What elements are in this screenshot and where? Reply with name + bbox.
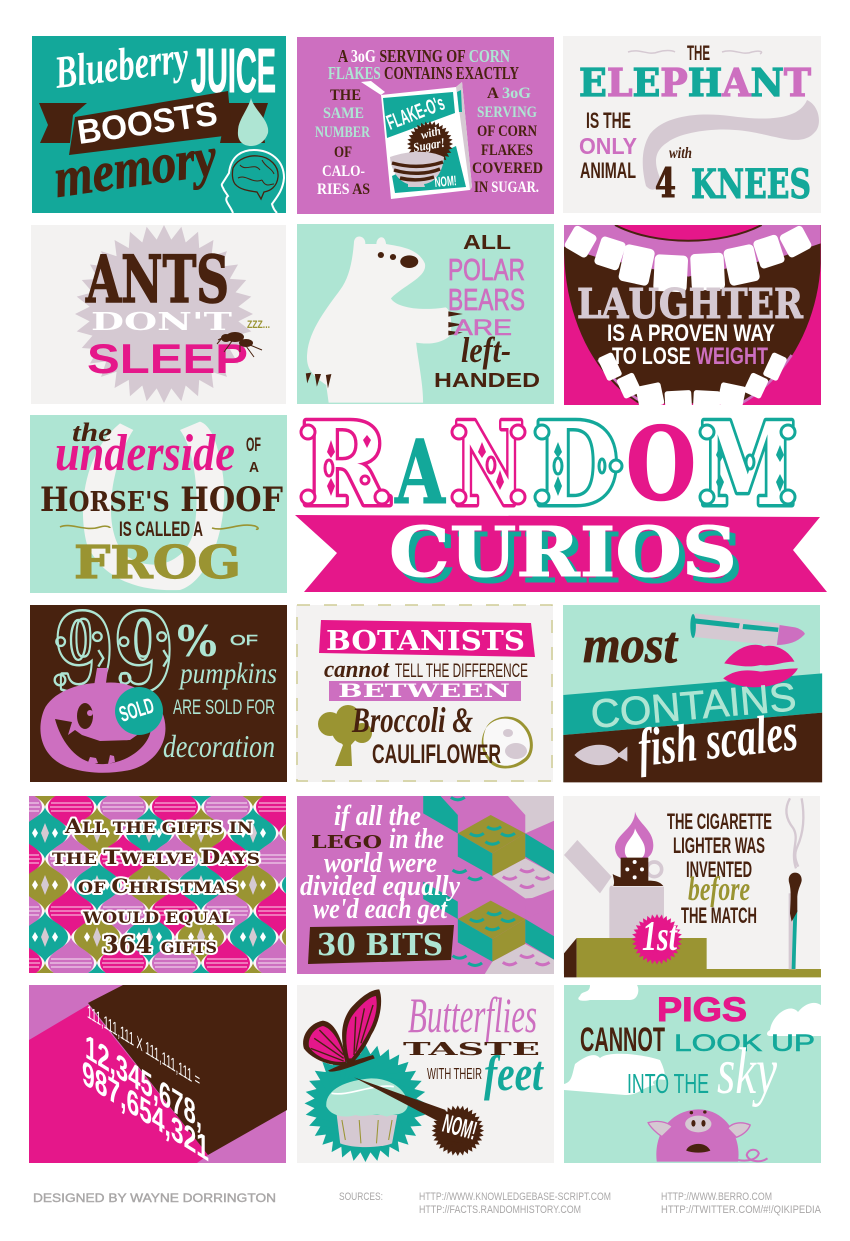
band: brown [563,713,822,782]
banner: brown ribbon [39,91,268,155]
text: christmas lines: OF CHRISTMAS [78,874,238,898]
text: intro lines: A 3oG SERVING OF CORN [338,46,510,66]
footer: sources column 1 [419,1191,611,1216]
panel: lipstick [563,605,822,782]
panel: corn flakes [297,37,554,214]
text: ARE: ARE [454,315,512,340]
text: left column: SAME [323,105,364,122]
illustration: cauliflower [482,717,533,768]
text: christmas lines [52,814,260,959]
illustration: mouth and teeth [563,224,821,413]
shape: brown block [88,985,287,1155]
heading: RANDOM letters [301,398,796,531]
text: divided equally: divided equally [300,870,460,902]
text: BOOSTS: BOOSTS [75,95,220,152]
illustration: lighter [564,840,664,938]
text: left column: OF [334,144,352,161]
illustration: cereal box: FLAKE-O's [384,92,448,135]
panel: laughter mouth [563,224,821,413]
illustration: pig [648,1109,767,1162]
band: teal [563,673,822,735]
banner: 30 bits [308,925,454,964]
icon: ant [217,332,262,357]
text: the cigarette: THE CIGARETTE [667,809,772,834]
text: HANDED: HANDED [434,370,540,392]
illustration: matchbox [564,938,821,977]
illustration: bear [306,237,463,403]
heading: PIGS: PIGS [657,991,747,1029]
panel: pigs [564,985,822,1163]
text: INTO THE: INTO THE [627,1068,709,1099]
text: sky: sky [717,1035,777,1108]
flourishes [60,525,258,529]
illustration: pumpkin [40,668,165,773]
text: percent: % [177,617,217,666]
text: BEARS: BEARS [448,282,525,317]
ornaments: teal letters [535,425,795,504]
text: the match: THE MATCH [681,903,757,928]
text: OF: OF [230,632,258,649]
text: left column: RIES AS [317,181,370,198]
text: left-: left- [461,330,511,370]
heading: RANDOM letters: D [535,398,619,531]
panel: lego [297,796,556,976]
title: Random Curios [295,398,827,599]
text: before: before [688,871,750,908]
text: lighter was: LIGHTER WAS [673,833,765,858]
text: CANNOT: CANNOT [580,1021,665,1059]
heading: Blueberry: Blueberry [51,31,192,98]
text: christmas lines: 364 GIFTS [102,930,217,959]
text: CONTAINS: CONTAINS [589,675,798,737]
text: CAULIFLOWER: CAULIFLOWER [372,739,501,769]
heading: Butterflies: Butterflies [408,987,537,1043]
text: most: most [583,617,678,674]
illustration: butterfly [303,989,381,1072]
heading: CURIOS shadow: CURIOS [395,519,743,599]
illustration: cereal box [361,81,472,199]
text: cannot: cannot [324,657,390,683]
text: we'd each get: we'd each get [313,893,448,925]
icon: 1st badge [629,911,685,968]
heading: FROG: FROG [74,536,241,589]
heading: RANDOM letters: A [394,420,446,524]
text: OF: OF [246,435,261,456]
text: with: with [669,145,692,162]
text: THE: THE [687,42,710,65]
text: left column [315,87,370,198]
ornaments: 99 inner lines [55,620,168,685]
heading: ELEPHANT: ELEPHANT [579,60,811,105]
illustration: clouds [564,985,822,1095]
heading: RANDOM letters: O [626,405,696,523]
heading: ANTS: ANTS [85,242,229,318]
panel: pumpkins [30,590,287,782]
panel: ants [31,215,286,413]
text: if all the: if all the [334,800,421,832]
heading: 99: 99 [54,590,174,715]
illustration: fish [574,745,627,765]
heading: TASTE: TASTE [403,1039,540,1060]
illustration: broccoli [318,705,372,766]
text: DON'T: DON'T [91,307,232,336]
illustration: cereal box: NOM! [434,172,457,190]
text: left column: NUMBER [315,124,370,141]
text: zzz: ZZZ... [247,319,270,331]
text: tell the difference: TELL THE DIFFERENCE [395,661,528,682]
heading: RANDOM letters: N [454,398,524,531]
heading: RANDOM letters: M [700,398,796,531]
text: decoration: decoration [163,728,275,764]
text: IS THE: IS THE [586,108,631,133]
panel: blueberry juice [32,31,286,213]
illustration: tongue [354,1077,446,1123]
illustration: lego blocks [423,796,556,976]
text: BETWEEN: BETWEEN [338,680,510,702]
footer: sources column 2: HTTP://TWITTER.COM/#!/QIKIPEDIA [661,1204,822,1216]
text: NOM!: NOM! [439,1108,480,1146]
heading: underside: underside [55,425,235,482]
text: equation: 111,111,111 X 111,111,111 = [87,1001,200,1092]
illustration: cupcake [326,1078,408,1147]
banner: between [329,681,521,701]
text: invented: INVENTED [686,857,752,882]
text: memory: memory [50,126,221,210]
banner: ribbon [295,515,827,592]
heading: BOTANISTS: BOTANISTS [326,626,525,657]
text: is called a: IS CALLED A [119,518,203,541]
text: Broccoli &: Broccoli & [351,700,473,740]
ornaments: pink letters [301,425,525,504]
icon: NOM burst [428,1102,487,1159]
text: right column: FLAKES [481,142,533,159]
text: to lose weight: TO LOSE WEIGHT [612,343,768,370]
text: world were: world were [324,847,437,879]
text: right column: IN SUGAR. [474,179,539,196]
illustration: elephant trunk [643,100,819,190]
illustration: teal burst [298,1038,433,1169]
text: christmas lines: WOULD EQUAL [82,908,233,927]
text: 4: 4 [655,160,676,207]
icon: head with brain [222,150,284,213]
panel: elephant [563,36,821,213]
text: pumpkins: pumpkins [178,657,277,690]
heading: LAUGHTER: LAUGHTER [577,280,804,328]
panel: lighter and match [563,796,821,977]
illustration: kiss [723,645,798,687]
text: right column: COVERED [472,160,543,177]
footer: sources column 1: HTTP://WWW.KNOWLEDGEBASE-SCRIPT.COM [419,1191,611,1203]
heading: KNEES: KNEES [691,161,811,208]
shape: pink plane [29,1005,208,1163]
text: ANIMAL: ANIMAL [580,158,636,183]
text: right column: OF CORN [477,123,537,140]
panel: twelve days of christmas [29,796,286,973]
footer: sources column 1: HTTP://FACTS.RANDOMHISTORY.COM [419,1204,581,1216]
illustration: horseshoe [83,422,224,590]
heading: CURIOS: CURIOS [389,513,737,593]
icon: SOLD sticker [115,687,163,735]
illustration: lipstick [690,613,805,646]
text: the: the [72,418,112,447]
panel: blueberry juice: JUICE [191,37,276,106]
footer: sources column 2 [661,1191,822,1216]
panel: multiplication [29,985,287,1169]
text: ONLY: ONLY [579,133,637,159]
flourishes [628,50,762,54]
illustration: cereal box: Sugar! [412,135,446,155]
text: 1st: 1st [642,914,678,960]
text: right column: A 3oG [487,85,532,102]
text: ALL: ALL [463,232,511,254]
illustration: flame [615,812,653,860]
icon: SOLD sticker: SOLD [116,693,157,727]
text: right column [472,85,543,196]
footer: sources column 2: HTTP://WWW.BERRO.COM [661,1191,772,1203]
starburst [65,215,263,413]
text: left column: THE [330,87,361,104]
footer: sources label: SOURCES: [339,1191,383,1203]
panel: botanists [296,605,553,782]
text: 12,345,678,: 12,345,678, [85,1026,202,1137]
text: feet: feet [484,1045,545,1101]
illustration: smoke and match [786,798,803,969]
illustration: cereal box: with [419,123,442,142]
text: in the: in the [389,823,444,855]
heading: RANDOM letters: R [301,398,390,531]
panel: butterflies [297,985,554,1169]
text: SLEEP: SLEEP [87,335,248,382]
text: A: A [249,459,259,476]
icon: water drop [238,98,268,146]
text: christmas lines: THE TWELVE DAYS [52,845,260,869]
text: 30 BITS: 30 BITS [317,928,443,963]
panel: horse hoof [30,415,287,593]
text: christmas lines: ALL THE GIFTS IN [64,814,253,838]
text: with their: WITH THEIR [427,1066,482,1083]
text: are sold for: ARE SOLD FOR [173,696,275,719]
text: LOOK UP: LOOK UP [674,1030,815,1057]
text: left column: CALO- [322,163,365,180]
heading: horse's hoof: HORSE'S HOOF [40,480,283,520]
banner: pink [319,620,535,657]
text: intro lines: FLAKES CONTAINS EXACTLY [328,63,519,83]
text: LEGO: LEGO [311,832,382,853]
panel: polar bear [297,224,554,404]
text: POLAR: POLAR [448,252,525,287]
text: 987,654,321: 987,654,321 [82,1052,209,1169]
text: intro lines [328,46,519,83]
footer: credit: DESIGNED BY WAYNE DORRINGTON [33,1191,276,1205]
text: is a proven way: IS A PROVEN WAY [607,320,775,347]
text: right column: SERVING [477,104,537,121]
